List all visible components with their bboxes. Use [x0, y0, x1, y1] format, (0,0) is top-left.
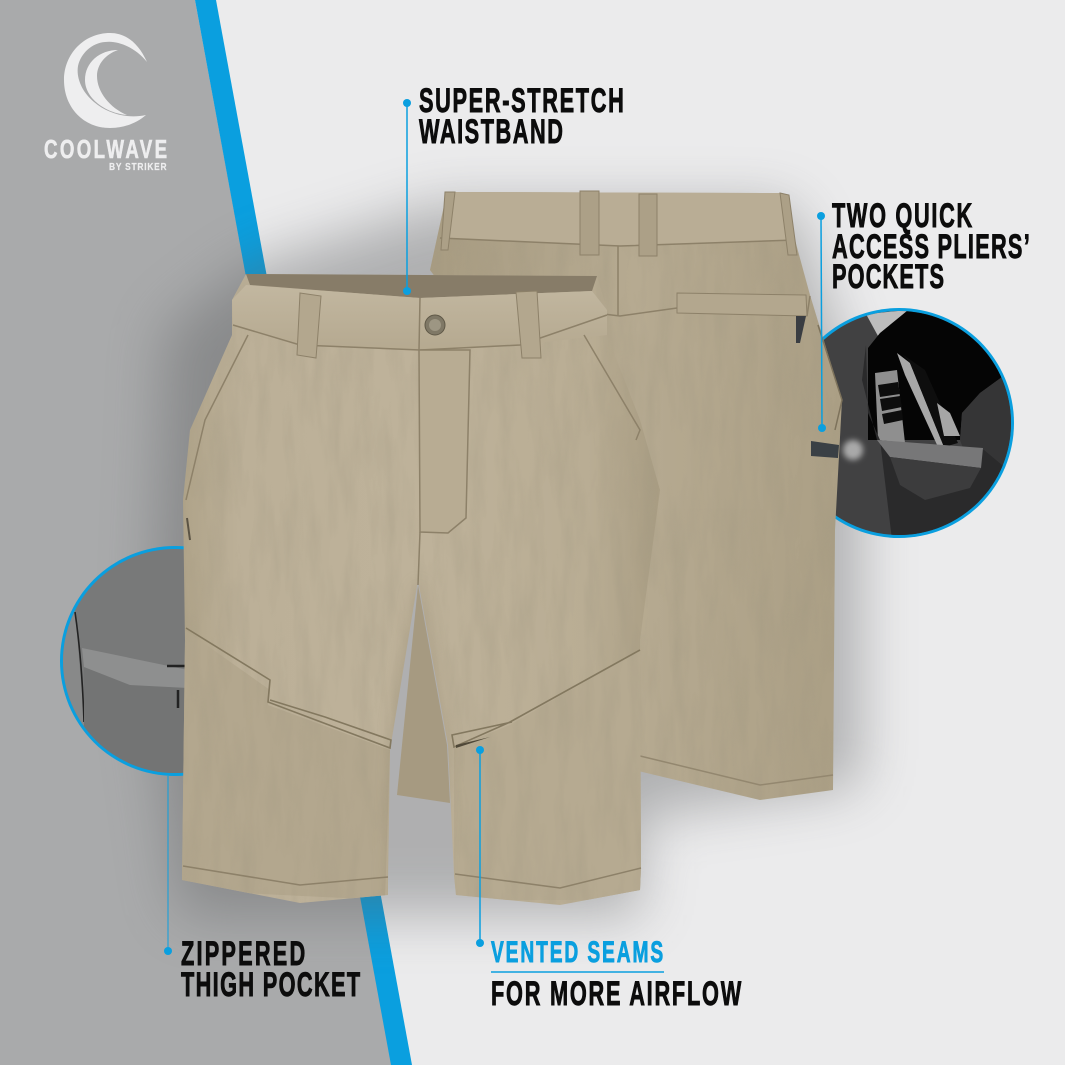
leader: waistband: [403, 99, 411, 295]
back belt loops: [441, 191, 797, 256]
background: grey diagonal panel: [0, 0, 392, 1065]
product shadow: [150, 205, 860, 915]
right thigh vent seam: [452, 650, 640, 747]
side zip mark: [187, 518, 190, 540]
leader: thigh pocket: [164, 776, 172, 955]
front shorts body: [182, 274, 660, 905]
centre seam: [418, 298, 420, 585]
logo sub-brand: BY STRIKER: [109, 161, 167, 173]
hem stitching: [183, 866, 641, 888]
logo: Coolwave by Striker: [44, 33, 167, 173]
label: vented seams for more airflow: FOR MORE AIRFLOW: [491, 975, 741, 1013]
back left leg: [397, 585, 450, 803]
button: [425, 315, 445, 335]
label: super-stretch waistband: [419, 82, 624, 151]
label: vented seams for more airflow: [491, 936, 741, 1013]
background: blue diagonal stripe: [195, 0, 412, 1065]
pocket seams: [186, 335, 640, 500]
back fabric texture: [420, 185, 850, 805]
detail circle: zippered thigh pocket: [60, 546, 185, 776]
back waistband: [442, 192, 795, 246]
back yoke seam: [570, 246, 810, 316]
dark pocket patch: [811, 441, 839, 458]
left thigh vent seam: [186, 628, 391, 748]
back shorts body: [430, 192, 842, 800]
logo mark: [64, 33, 147, 128]
label: two quick access pliers' pockets: ACCESS PLIERS’: [832, 228, 1030, 266]
label: zippered thigh pocket: ZIPPERED: [181, 935, 305, 973]
label: zippered thigh pocket: THIGH POCKET: [181, 966, 361, 1004]
front shorts: [175, 270, 665, 910]
leader: vented seams: [476, 746, 484, 947]
detail circle: pliers pocket: [822, 308, 1014, 538]
front belt loops: [297, 291, 541, 358]
label: two quick access pliers' pockets: [832, 197, 1030, 296]
logo wordmark: COOLWAVE: [44, 134, 167, 164]
waistband inner: [246, 274, 597, 298]
label: two quick access pliers' pockets: TWO QUICK: [832, 197, 972, 235]
label: super-stretch waistband: WAISTBAND: [419, 113, 563, 151]
leader: pliers pockets: [817, 212, 826, 432]
front waistband: [232, 285, 607, 350]
back hem: [636, 755, 833, 785]
back pocket zip: [796, 316, 806, 343]
label: zippered thigh pocket: [181, 935, 361, 1004]
back shorts: [397, 185, 850, 805]
back pocket flap: [677, 293, 807, 316]
front fly placket: [419, 350, 470, 533]
label: vented seams for more airflow: VENTED SEAMS: [491, 936, 663, 969]
label: two quick access pliers' pockets: POCKETS: [832, 258, 944, 296]
label: super-stretch waistband: SUPER-STRETCH: [419, 82, 624, 120]
side pocket seam: [818, 325, 842, 430]
